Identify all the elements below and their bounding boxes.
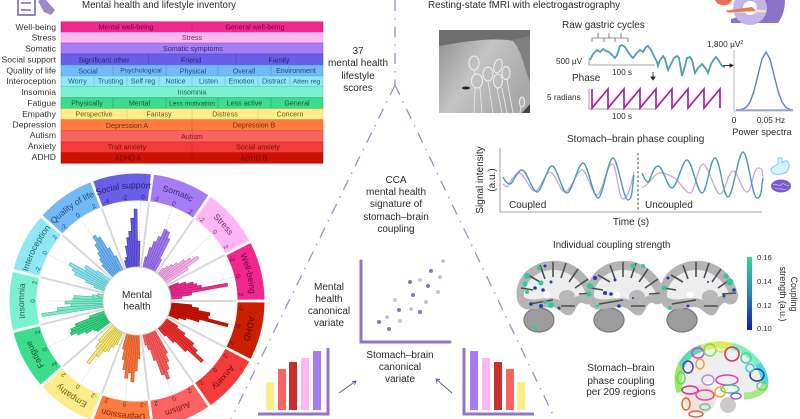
chart: coupling waves: Time (s) — [613, 217, 649, 228]
sector: somatic: -2 — [151, 194, 161, 204]
chart: phase sawtooth: 100 s — [612, 112, 632, 121]
arrow: signal to spectrum — [723, 64, 733, 67]
text: stomach-brain canonical variate: variate — [385, 374, 415, 385]
sector: anxiety: -2 — [222, 352, 228, 358]
sector: autism: Autism — [165, 401, 190, 415]
chart: power spectra — [707, 39, 793, 137]
sector: interoception: Interoception — [22, 226, 50, 271]
dash-dot triangle dividers — [231, 0, 555, 419]
sector: interoception: -2 — [36, 266, 40, 272]
chart: coupling waves: Uncoupled — [645, 200, 693, 211]
sector: quality of life: 2 — [92, 204, 96, 209]
colour bar: coupling strength: 0.14 — [757, 277, 772, 286]
heading: inventory: Mental health and lifestyle inventory — [82, 0, 236, 11]
row: interoception: Worry — [68, 78, 87, 86]
row: interoception: Notice — [165, 78, 186, 86]
brain slice 3 — [660, 261, 738, 332]
row: interoception: Atten reg — [293, 78, 321, 86]
chart: power spectra: Power spectra — [732, 127, 793, 137]
icon: stomach — [771, 158, 789, 174]
sector: anxiety: Anxiety — [212, 364, 234, 390]
row: social support: Friend — [181, 56, 201, 64]
heading: raw gastric cycles: Raw gastric cycles — [562, 20, 645, 31]
sector: interoception — [14, 218, 112, 292]
sector: fatigue: 0 — [42, 348, 47, 352]
arrow: signal to phase — [651, 72, 655, 80]
chart: power spectra: 2 — [740, 40, 743, 46]
row: social support: Social support — [2, 54, 57, 64]
sector: empathy: 0 — [76, 384, 80, 389]
centre label: mental health: health — [123, 302, 151, 312]
row: fatigue: General — [284, 100, 310, 108]
brain atlas with coloured regions — [677, 342, 767, 417]
row: anxiety — [28, 141, 323, 153]
sector: social support: -2 — [122, 195, 128, 200]
row: interoception: Self reg — [131, 78, 155, 86]
colour bar: coupling strength: strength (a.u.) — [778, 267, 788, 321]
chart: raw EGG signal: 100 s — [612, 68, 632, 77]
sector: anxiety — [156, 318, 250, 405]
arrow: left bars to variate — [339, 381, 356, 393]
row: ADHD: ADHD A — [115, 154, 141, 162]
sector: quality of life: Quality of life — [51, 192, 94, 223]
row: stress: Stress — [32, 33, 56, 43]
text: 37 mental health lifestyle scores: scores — [343, 83, 373, 94]
sector: well-being: -2 — [227, 255, 236, 264]
text: stomach-brain canonical variate — [366, 350, 434, 385]
row: well-being: Mental well-being — [98, 24, 154, 32]
sector: insomnia: 2 — [32, 281, 37, 284]
icon: cycle brackets — [592, 33, 628, 42]
icon: clipboard and hand — [18, 0, 55, 15]
panel: inventory table — [2, 22, 323, 163]
colour bar: coupling strength: 0.12 — [757, 301, 772, 310]
row: quality of life: Social — [78, 68, 98, 76]
sector: insomnia — [10, 272, 104, 330]
chart: power spectra: 0.05 Hz — [757, 116, 785, 125]
sector: empathy: -2 — [91, 392, 96, 398]
chart: left mini bars — [258, 348, 328, 414]
row: quality of life: Environment — [276, 67, 316, 75]
row: somatic — [25, 43, 323, 54]
row: ADHD: ADHD — [32, 152, 56, 162]
sector: somatic: 2 — [187, 208, 194, 217]
text: per 209 regions — [586, 363, 656, 398]
row: interoception: Trusting — [98, 78, 123, 86]
row: interoception: Interoception — [6, 76, 56, 86]
chart: phase sawtooth: 5 radians — [547, 93, 581, 102]
row: interoception: Distract — [262, 78, 286, 86]
row: fatigue: Fatigue — [27, 98, 56, 108]
sector: depression — [94, 333, 150, 419]
chart: power spectra: 0 — [732, 116, 737, 125]
sector: somatic: 0 — [171, 200, 177, 208]
row: empathy: Perspective — [75, 111, 113, 119]
text: mental health canonical variate: Mental — [314, 282, 344, 293]
row: empathy: Fantasy — [146, 111, 172, 119]
text: CCA signature: CCA — [385, 175, 407, 186]
row: somatic: Somatic symptoms — [163, 45, 223, 53]
sector: empathy: Empathy — [56, 384, 87, 408]
sector: well-being: Well-being — [238, 251, 260, 296]
text: 37 mental health lifestyle scores: 37 — [352, 46, 364, 57]
sector: fatigue — [14, 308, 110, 384]
row: anxiety: Social anxiety — [236, 144, 280, 152]
row: anxiety: Trait anxiety — [108, 144, 147, 152]
row: ADHD — [32, 152, 323, 163]
text: per 209 regions: Stomach–brain — [587, 363, 655, 374]
row: insomnia: Insomnia — [21, 87, 56, 97]
chart: phase sawtooth — [547, 89, 720, 121]
text: per 209 regions: phase coupling — [587, 376, 655, 387]
row: depression: Depression — [13, 120, 56, 130]
sector: social support — [93, 174, 151, 268]
chart: raw EGG signal — [556, 45, 725, 77]
row: interoception: Listen — [199, 78, 218, 86]
row: depression — [13, 120, 323, 131]
sector: depression: 2 — [104, 398, 108, 403]
sector: insomnia: Insomnia — [18, 284, 26, 318]
text: mental health canonical variate — [308, 282, 350, 329]
sector: quality of life: 0 — [76, 213, 80, 218]
sector: quality of life — [42, 182, 126, 277]
colour bar: coupling strength: 0.16 — [757, 253, 772, 262]
sector: quality of life: -2 — [62, 224, 67, 230]
chart: coupling waves: Signal intensity — [475, 146, 486, 214]
sector: ADHD: ADHD — [244, 316, 254, 340]
row: empathy: Empathy — [22, 109, 57, 119]
sector: anxiety: 0 — [212, 368, 217, 372]
text: CCA signature: mental health — [366, 187, 426, 198]
sector: well-being: 0 — [234, 274, 241, 279]
sector: interoception: 0 — [42, 250, 47, 254]
text: 37 mental health lifestyle scores: lifestyle — [341, 71, 375, 82]
sector: stress: Stress — [211, 211, 236, 237]
row: social support — [2, 54, 323, 65]
row: fatigue: Less motivation — [169, 101, 215, 108]
sector: social support: Social support — [96, 183, 151, 195]
sector: autism: 0 — [172, 396, 176, 401]
row: anxiety: Anxiety — [28, 141, 57, 151]
sector: insomnia: 0 — [30, 300, 35, 302]
row: fatigue: Less active — [227, 100, 262, 108]
sector: empathy — [42, 323, 124, 419]
text: CCA signature — [363, 175, 429, 235]
sector: anxiety: 2 — [199, 380, 204, 385]
row: social support: Significant other — [79, 56, 130, 64]
sector: autism: 2 — [154, 400, 158, 406]
row: autism — [30, 130, 323, 142]
sector: well-being — [168, 243, 264, 302]
row: quality of life: Psychological — [120, 68, 162, 74]
heading: stomach-brain phase coupling: Stomach–brain phase coupling — [567, 134, 704, 145]
row: well-being: Well-being — [16, 22, 56, 32]
row: insomnia — [21, 87, 323, 98]
row: autism: Autism — [181, 133, 203, 141]
sector: autism: -2 — [187, 388, 193, 394]
sector: social support: -4 — [104, 198, 110, 204]
row: well-being — [16, 22, 323, 32]
sector: ADHD: 2 — [230, 341, 234, 346]
colour bar: coupling strength: 0.10 — [757, 324, 772, 333]
chart: coupling waves: (a.u.) — [487, 168, 498, 192]
photo: electrodes on abdomen — [439, 30, 530, 113]
sector: fatigue: 2 — [35, 330, 40, 334]
sector: somatic — [142, 174, 208, 273]
row: quality of life — [6, 65, 323, 76]
sector: interoception: 2 — [52, 235, 58, 240]
row: fatigue: Mental — [129, 100, 151, 108]
row: stress: Stress — [182, 34, 203, 42]
sector: stress — [158, 197, 250, 286]
colour bar: coupling strength — [747, 253, 799, 333]
chart: power spectra: 1,800 µV — [707, 39, 740, 49]
heading: resting-state fMRI: Resting-state fMRI with electrogastrography — [428, 0, 620, 11]
row: somatic: Somatic — [25, 44, 57, 54]
sector: depression: -2 — [140, 402, 146, 408]
text: mental health canonical variate: health — [315, 294, 343, 305]
row: empathy: Distress — [212, 111, 238, 119]
sector: ADHD: 0 — [236, 324, 240, 328]
chart: coupling waves: Coupled — [509, 200, 546, 211]
row: depression: Depression B — [233, 122, 276, 130]
chart: coupling waves — [475, 146, 763, 228]
chart: right mini bars — [464, 348, 534, 414]
row: insomnia: Insomnia — [178, 89, 206, 97]
text: 37 mental health lifestyle scores — [328, 46, 388, 94]
heading: individual coupling strength: Individual coupling strength — [553, 240, 670, 251]
row: well-being: General well-being — [225, 24, 285, 32]
row: stress — [32, 32, 323, 43]
brain slice 2 — [586, 261, 665, 332]
sector: depression: 0 — [122, 402, 126, 407]
row: ADHD: ADHD B — [241, 154, 268, 162]
sector: stress: 0 — [211, 229, 219, 236]
row: fatigue: Physically — [71, 100, 103, 108]
sector: autism — [140, 330, 208, 419]
heading: phase: Phase — [572, 73, 601, 84]
sector: ADHD: -2 — [238, 305, 244, 310]
sector: empathy: 2 — [62, 372, 66, 377]
text: stomach-brain canonical variate: canonical — [379, 362, 421, 373]
text: mental health canonical variate: canonical — [308, 306, 350, 317]
row: interoception: Emotion — [228, 78, 255, 86]
chart: raw EGG signal: 500 µV — [556, 57, 583, 66]
text: stomach-brain canonical variate: Stomach–brain — [366, 350, 434, 361]
colour bar: coupling strength: Coupling — [789, 277, 799, 311]
text: mental health canonical variate: variate — [314, 318, 344, 329]
sector: ADHD — [167, 301, 264, 359]
row: quality of life: Overall — [233, 68, 256, 76]
text: 37 mental health lifestyle scores: mental health — [328, 58, 388, 69]
row: fatigue — [27, 98, 323, 109]
chart: circular mental health bar plot — [10, 174, 264, 419]
row: social support: Family — [269, 56, 290, 64]
sector: well-being: 2 — [236, 291, 245, 298]
text: CCA signature: signature of — [370, 199, 422, 210]
sector: fatigue: -2 — [52, 362, 57, 367]
sector: stress: -2 — [196, 214, 207, 225]
row: quality of life: Quality of life — [6, 66, 56, 76]
chart: canonical variate scatter — [361, 259, 450, 342]
centre label: mental health — [103, 267, 171, 335]
row: quality of life: Physical — [180, 68, 207, 76]
text: CCA signature: coupling — [377, 224, 415, 235]
centre label: mental health: Mental — [122, 290, 152, 301]
row: depression: Depression A — [106, 122, 148, 130]
arrow: right bars to variate — [436, 379, 452, 393]
sector: social support: 0 — [141, 194, 144, 200]
text: CCA signature: stomach–brain — [363, 212, 429, 223]
sector: stress: 2 — [221, 243, 230, 252]
row: interoception — [6, 76, 323, 87]
icon: brain — [771, 180, 791, 192]
sector: somatic: Somatic — [162, 186, 192, 202]
row: autism: Autism — [30, 130, 56, 140]
row: empathy: Concern — [277, 111, 303, 119]
icon: MRI scanner with patient — [715, 0, 785, 25]
text: per 209 regions: per 209 regions — [586, 387, 656, 398]
row: empathy — [22, 109, 323, 120]
brain slice 1 — [517, 261, 595, 332]
sector: fatigue: Fatigue — [28, 341, 44, 368]
